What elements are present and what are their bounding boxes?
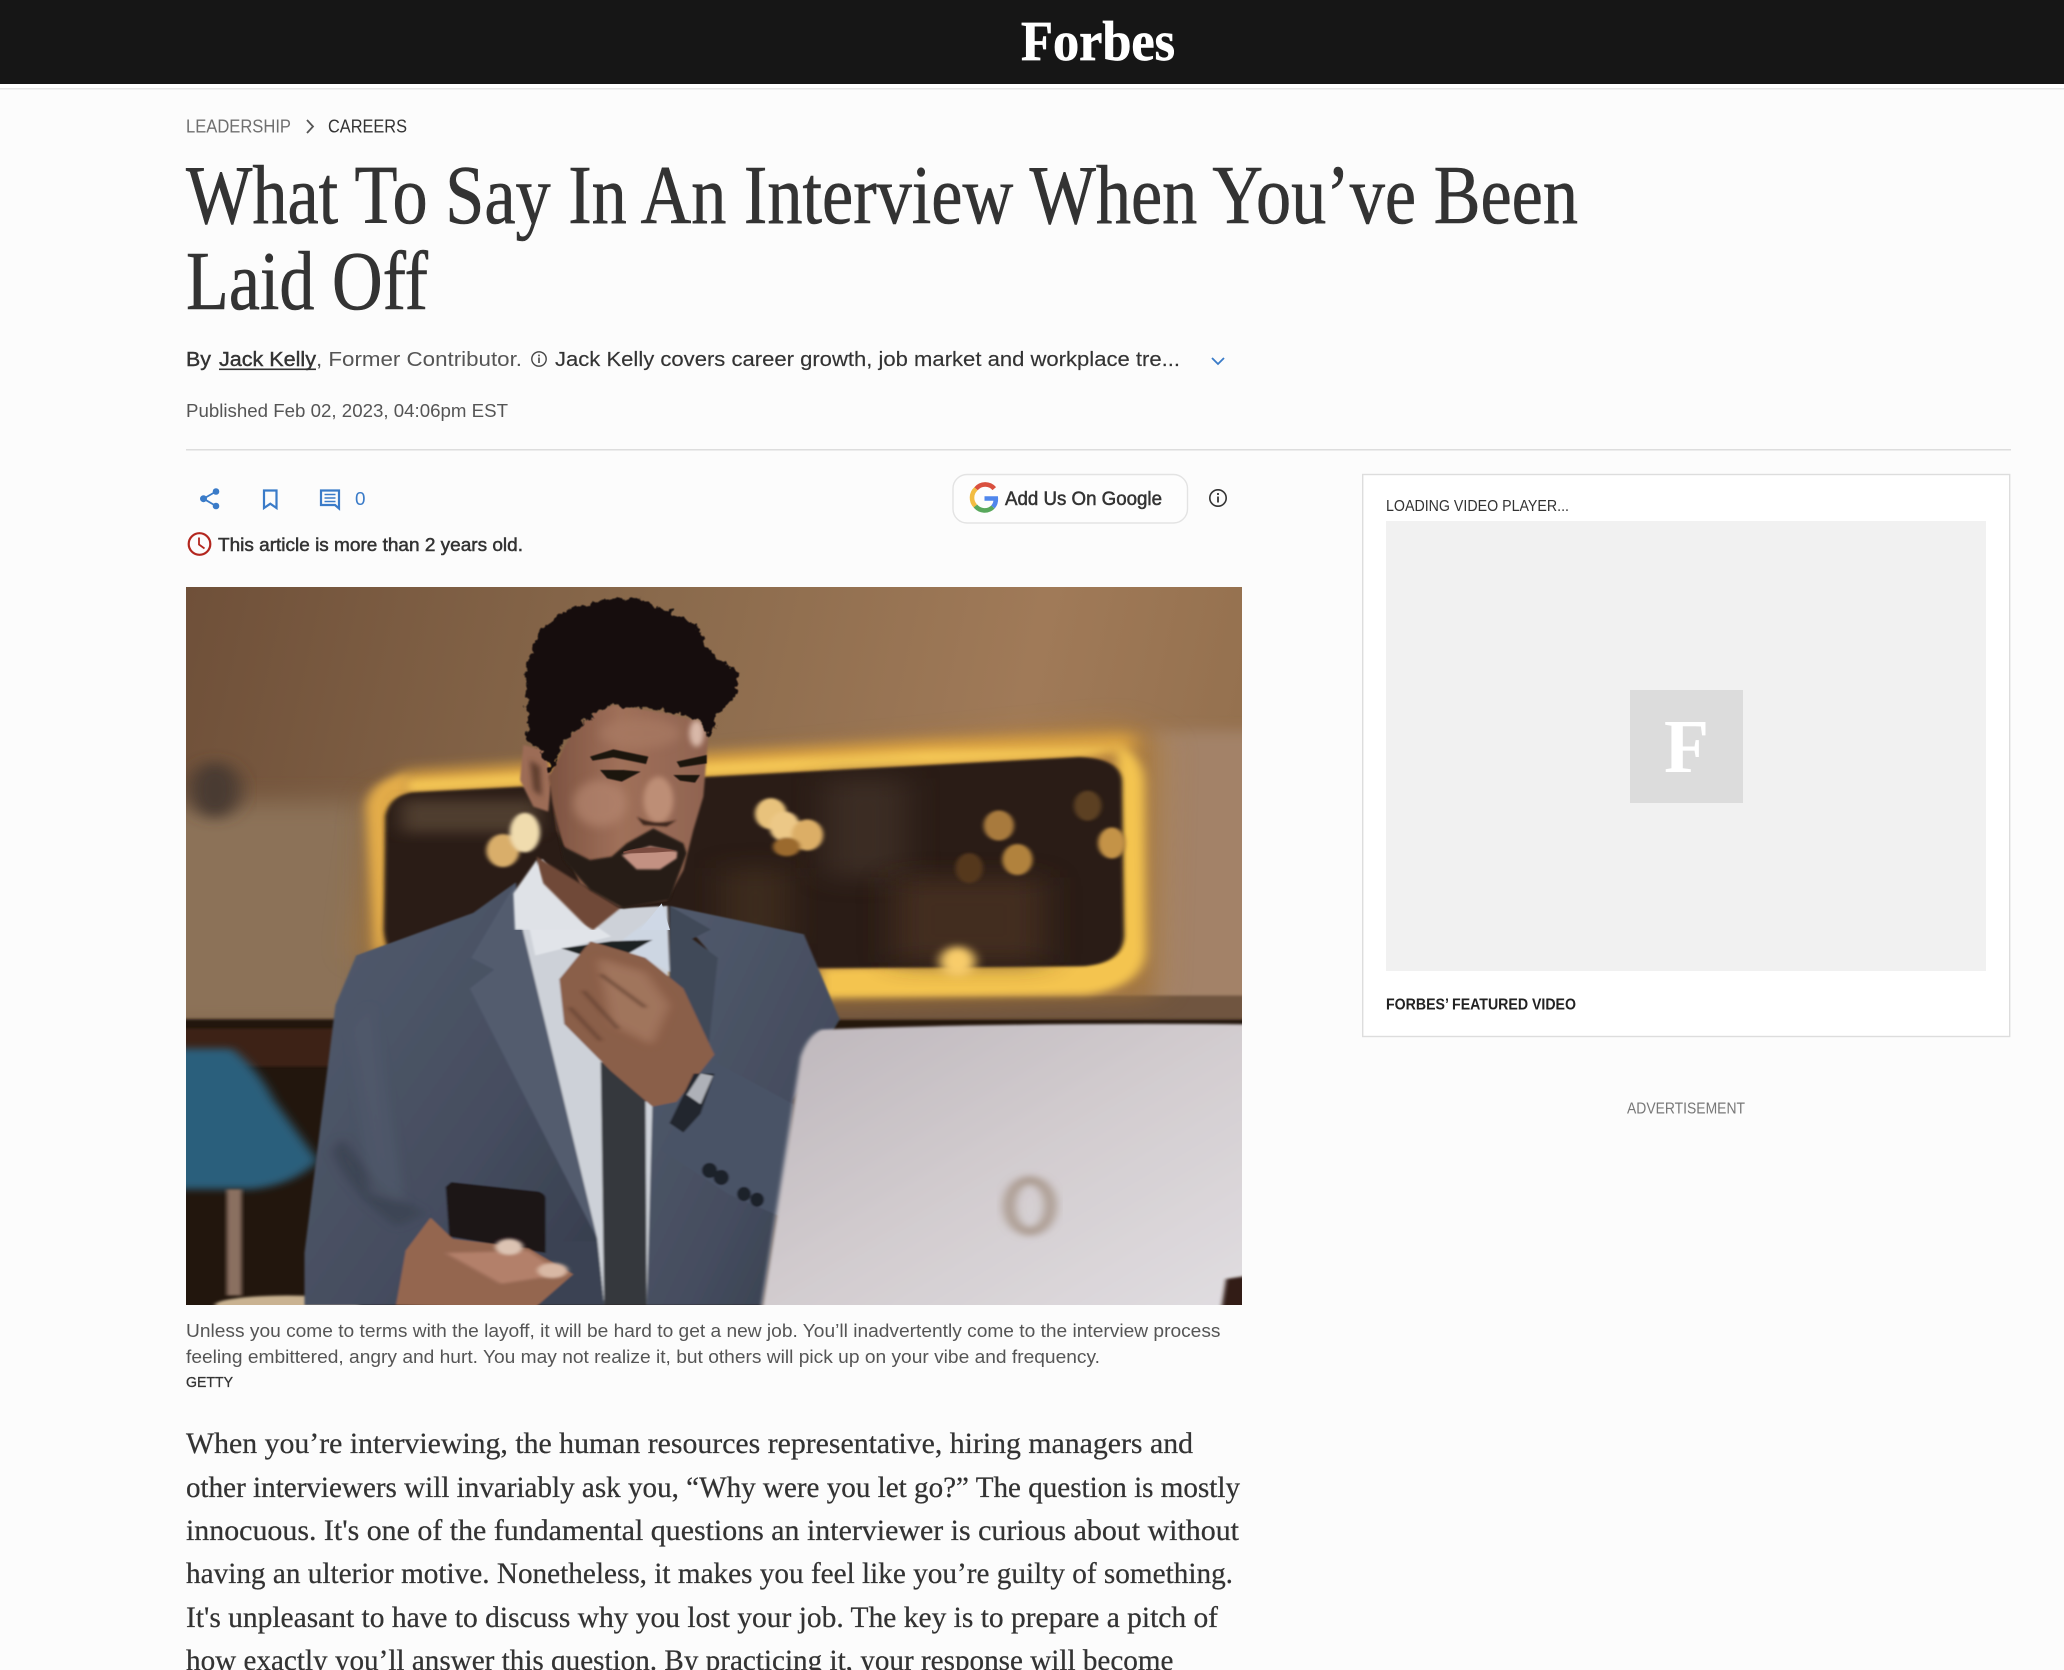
advertisement label: ADVERTISEMENT bbox=[1627, 1100, 1745, 1118]
photo caption: Unless you come to terms with the layoff, it will be hard to get a new job. You’ll inadvertently come to the interview process bbox=[186, 1320, 1220, 1341]
jacket bbox=[304, 882, 604, 1305]
article body text bbox=[186, 1427, 1240, 1670]
icon: info bbox=[1210, 490, 1226, 506]
byline: By bbox=[186, 348, 212, 371]
lower hand bbox=[396, 1218, 573, 1307]
title: What To Say In An Interview When You’ve Been bbox=[186, 149, 1578, 242]
button: Add Us On Google bbox=[953, 474, 1188, 523]
shirt bbox=[521, 859, 670, 1305]
byline: Jack Kelly covers career growth, job market and workplace tre... bbox=[555, 348, 1180, 371]
breadcrumb bbox=[186, 116, 407, 136]
window interior bbox=[384, 757, 1124, 968]
icon: comments with count bbox=[321, 489, 366, 509]
photo caption: feeling embittered, angry and hurt. You may not realize it, but others will pick up on your vibe and frequency. bbox=[186, 1346, 1100, 1367]
icon: share bbox=[200, 489, 219, 509]
video placeholder: F bbox=[1664, 705, 1709, 789]
head of the man bbox=[512, 596, 740, 930]
icon: comments with count: 0 bbox=[355, 489, 366, 509]
article body text: When you’re interviewing, the human resources representative, hiring managers and bbox=[186, 1427, 1193, 1460]
title: Laid Off bbox=[186, 235, 428, 328]
divider bbox=[186, 449, 2011, 450]
photo caption: GETTY bbox=[186, 1375, 233, 1391]
byline: Jack Kelly bbox=[219, 348, 317, 371]
title bbox=[186, 149, 1578, 328]
button: Add Us On Google: Add Us On Google bbox=[1005, 489, 1162, 510]
breadcrumb: LEADERSHIP bbox=[186, 116, 291, 136]
glow around window bbox=[356, 722, 1162, 1005]
tie bbox=[601, 1062, 647, 1305]
header bar with Forbes logo bbox=[0, 0, 2064, 90]
article body text: innocuous. It's one of the fundamental questions an interviewer is curious about without bbox=[186, 1514, 1240, 1547]
photo: man in suit adjusting tie at laptop bbox=[129, 587, 1300, 1345]
video caption: FORBES’ FEATURED VIDEO bbox=[1386, 996, 1576, 1014]
article body text: It's unpleasant to have to discuss why you lost your job. The key is to prepare a pitch of bbox=[186, 1601, 1218, 1634]
laptop bbox=[756, 1024, 1300, 1345]
video placeholder bbox=[1386, 521, 1986, 971]
header bar with Forbes logo: Forbes bbox=[1021, 11, 1175, 73]
sleeve bbox=[661, 1062, 794, 1218]
icon: bookmark bbox=[264, 490, 276, 508]
breadcrumb: CAREERS bbox=[328, 116, 407, 136]
article body text: having an ulterior motive. Nonetheless, it makes you feel like you’re guilty of something. bbox=[186, 1557, 1233, 1590]
loading label: LOADING VIDEO PLAYER... bbox=[1386, 498, 1569, 515]
chair bbox=[156, 1049, 318, 1189]
byline: , Former Contributor. bbox=[316, 348, 522, 371]
article body text: other interviewers will invariably ask you, “Why were you let go?” The question is mostly bbox=[186, 1471, 1240, 1504]
photo caption bbox=[186, 1320, 1220, 1391]
notice: article age: This article is more than 2 years old. bbox=[218, 534, 523, 555]
raised hand bbox=[559, 941, 714, 1107]
phone bbox=[446, 1182, 546, 1253]
byline bbox=[186, 348, 1224, 371]
published date: Published Feb 02, 2023, 04:06pm EST bbox=[186, 400, 508, 421]
panel: featured video bbox=[1363, 474, 2010, 1036]
